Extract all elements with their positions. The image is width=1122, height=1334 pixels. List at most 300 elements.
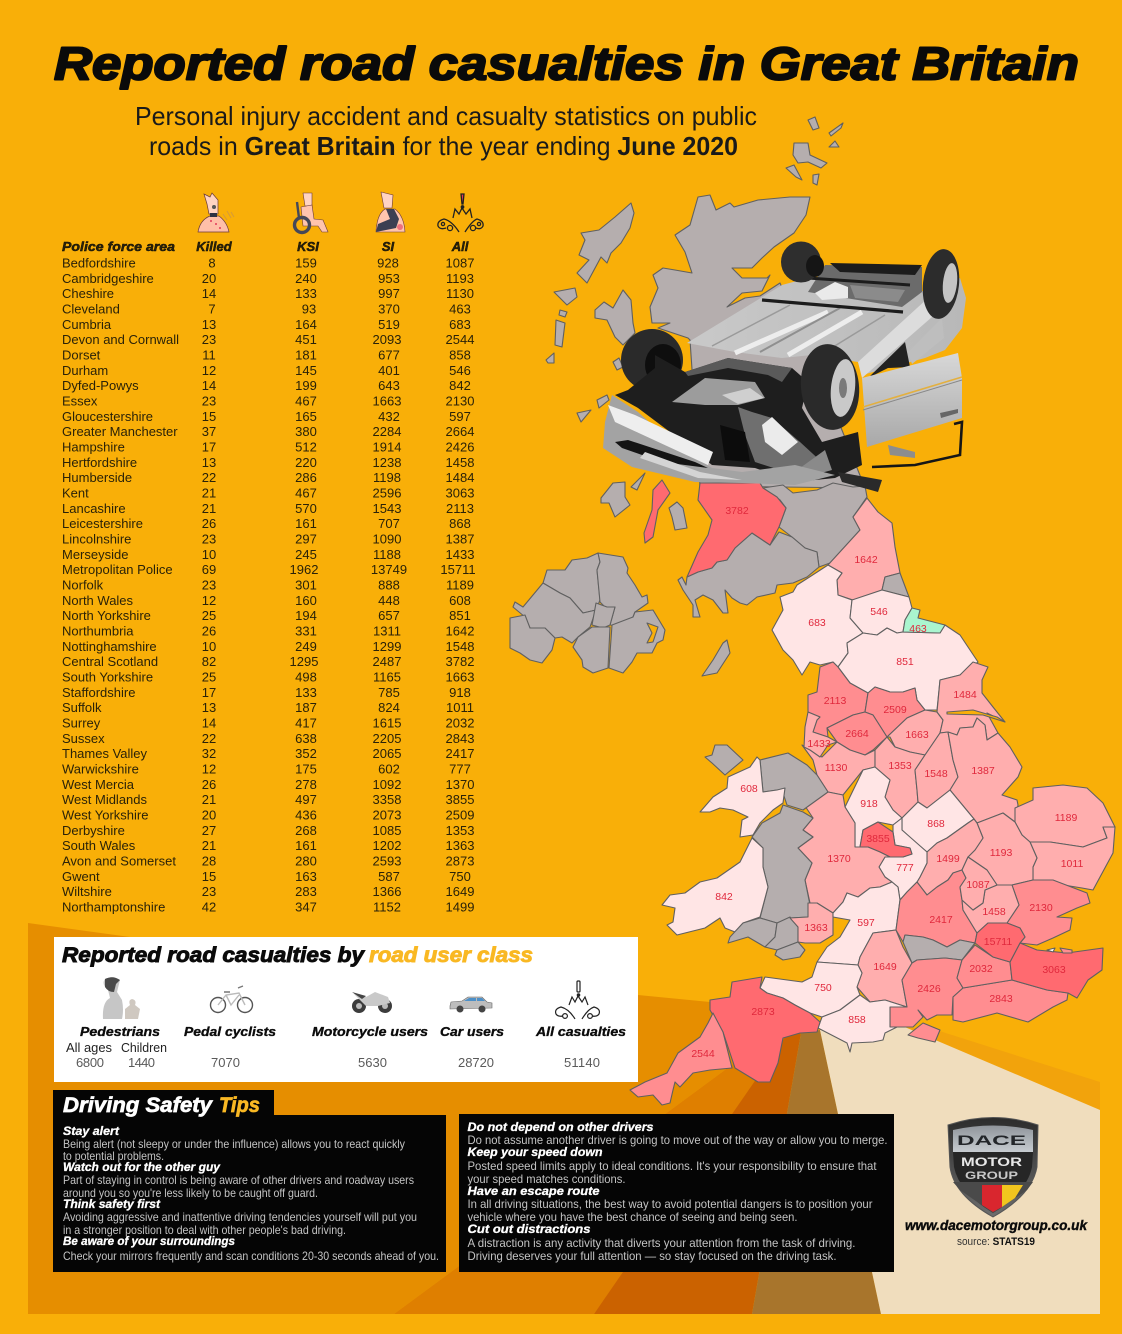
region: Derbyshire <box>875 737 925 818</box>
region: Suffolk: 1011 <box>1061 858 1083 870</box>
row: Northamptonshire: Northamptonshire <box>62 900 165 914</box>
tip: be aware <box>63 1236 439 1263</box>
row: Cambridgeshire: Cambridgeshire <box>62 271 154 286</box>
row: Cambridgeshire: 1193 <box>446 271 474 286</box>
subtitle <box>135 101 757 161</box>
region: Cumbria: 683 <box>808 617 826 629</box>
region: Cumbria <box>772 565 863 675</box>
road user labels: Motorcycle users <box>312 1024 428 1039</box>
row: Cheshire: 133 <box>295 286 317 301</box>
region: Essex: 2130 <box>1029 902 1053 914</box>
row: Devon and Cornwall: 2544 <box>446 332 474 347</box>
panel: driving safety tips left <box>53 1090 446 1272</box>
row: Norfolk: 23 <box>202 578 216 592</box>
row: Thames Valley: 2065 <box>373 746 401 761</box>
row: Hertfordshire: 13 <box>202 455 216 470</box>
row: Cleveland: 463 <box>449 302 471 316</box>
region: Devon: 2873 <box>751 1006 775 1018</box>
row: Lancashire: 1543 <box>373 501 401 516</box>
row: Warwickshire: 777 <box>449 762 471 776</box>
row: Surrey: 2032 <box>446 716 474 730</box>
row: Cambridgeshire <box>62 271 474 286</box>
map: Isle of Man <box>702 640 730 676</box>
tip: think safety first: Think safety first <box>63 1199 161 1211</box>
tip: watch out: around you so you're less likely to be caught off guard. <box>63 1186 318 1200</box>
row: Durham: Durham <box>62 363 108 378</box>
tip: stay alert <box>63 1126 405 1163</box>
row: Leicestershire: 868 <box>449 516 471 531</box>
map: North Wales grey area <box>760 753 828 810</box>
row: West Yorkshire: 20 <box>202 808 216 822</box>
row: Greater Manchester: 2284 <box>373 424 401 439</box>
region: Sussex: 2843 <box>989 993 1013 1005</box>
row: Kent: 467 <box>295 486 317 500</box>
row: Dyfed-Powys: 842 <box>449 378 471 393</box>
row: Gwent: 163 <box>295 869 317 884</box>
row: Merseyside: Merseyside <box>62 547 128 562</box>
region: Northumbria: 1642 <box>854 554 878 566</box>
icon: KSI wheelchair <box>294 193 328 232</box>
row: Leicestershire: 707 <box>378 516 400 531</box>
region: Bedfordshire: 1087 <box>966 879 990 891</box>
region: Cornwall <box>630 1013 732 1105</box>
row: Leicestershire: 26 <box>202 516 216 531</box>
row: South Yorkshire: 498 <box>295 670 317 684</box>
tip: speed <box>468 1147 877 1186</box>
row: Central Scotland: 82 <box>202 654 216 669</box>
road user labels: Pedestrians <box>80 1024 160 1039</box>
tip: stay alert: to potential problems. <box>63 1149 164 1163</box>
row: North Wales: 448 <box>378 593 400 608</box>
row: Merseyside: 10 <box>202 547 216 562</box>
row: Wiltshire <box>62 884 474 899</box>
row: Nottinghamshire: 1548 <box>446 639 474 654</box>
row: South Wales: 1202 <box>373 838 401 853</box>
region: Gloucestershire: 597 <box>857 917 875 929</box>
row: Kent <box>62 486 474 500</box>
row: Merseyside: 1433 <box>446 547 474 562</box>
region: Durham: 546 <box>870 606 888 618</box>
row: Lincolnshire: 23 <box>202 532 216 546</box>
row: Humberside: 286 <box>295 470 317 485</box>
row: West Yorkshire: 2509 <box>446 808 474 822</box>
row: Dorset: 677 <box>378 348 400 362</box>
row: Northumbria: Northumbria <box>62 624 134 638</box>
region: Merseyside: 1433 <box>807 738 831 750</box>
row: South Yorkshire: 1663 <box>446 670 474 684</box>
tip: distractions: Driving deserves your full attention — so stay focused on the driving task. <box>468 1249 836 1263</box>
row: Northamptonshire <box>62 900 474 914</box>
row: Durham: 145 <box>295 363 317 378</box>
row: Thames Valley <box>62 746 474 761</box>
row: Lincolnshire: 297 <box>295 532 317 546</box>
row: Bedfordshire: 1087 <box>446 256 474 270</box>
row: Avon and Somerset: 280 <box>295 854 317 868</box>
map: police force areas <box>510 117 1115 1105</box>
row: Hampshire <box>62 440 474 454</box>
row: Leicestershire: 161 <box>295 516 317 531</box>
region: Lincolnshire <box>948 718 1022 823</box>
row: Suffolk: 187 <box>295 700 317 715</box>
row: Metropolitan Police: 13749 <box>371 562 407 577</box>
row: North Yorkshire <box>62 608 471 623</box>
row: North Yorkshire: 657 <box>378 608 400 623</box>
row: Greater Manchester: 380 <box>295 424 317 439</box>
row: South Wales <box>62 838 474 853</box>
region: West Midlands <box>860 822 912 857</box>
tip: be aware: Check your mirrors frequently and scan conditions 20-30 seconds ahead of you. <box>63 1249 439 1263</box>
row: Gwent: 15 <box>202 869 216 884</box>
row: Kent: 3063 <box>446 486 474 500</box>
road user class heading <box>62 944 533 967</box>
region: West Yorkshire <box>865 687 925 737</box>
row: Derbyshire: Derbyshire <box>62 823 125 838</box>
region: Somerset: 750 <box>814 982 832 994</box>
row: Devon and Cornwall: 23 <box>202 332 216 347</box>
row: South Yorkshire: 1165 <box>373 670 401 684</box>
row: South Yorkshire: South Yorkshire <box>62 670 153 684</box>
table header <box>62 239 469 254</box>
tip: escape route: Have an escape route <box>468 1186 600 1198</box>
row: Suffolk: 13 <box>202 700 216 715</box>
row: Lincolnshire: 1090 <box>373 532 401 546</box>
pedestrian sub labels: Children <box>121 1040 167 1055</box>
row: Essex: 467 <box>295 394 317 408</box>
road user labels: All casualties <box>535 1024 626 1039</box>
row: Gloucestershire: Gloucestershire <box>62 409 153 424</box>
panel: road user class <box>54 937 638 1082</box>
row: Central Scotland <box>62 654 474 669</box>
region: Kent <box>1010 943 1103 998</box>
row: Norfolk <box>62 578 474 592</box>
map: Thames estuary islands <box>1047 948 1072 953</box>
table header: SI <box>382 239 395 254</box>
row: Devon and Cornwall <box>62 332 474 347</box>
row: West Yorkshire <box>62 808 474 822</box>
logo: Dace Motor Group shield: MOTOR <box>961 1155 1022 1169</box>
row: Greater Manchester: 2664 <box>446 424 474 439</box>
region: Cheshire <box>802 742 875 795</box>
region: Lancashire <box>808 662 868 737</box>
region: Leicestershire <box>902 790 974 852</box>
region: West Mercia: 1370 <box>827 853 851 865</box>
region: West Midlands: 3855 <box>866 833 890 845</box>
icon: car <box>450 997 492 1012</box>
row: Staffordshire: 918 <box>449 685 471 700</box>
pedestrian sub labels <box>66 1040 167 1055</box>
table header: All <box>451 239 469 254</box>
region: Hampshire: 2426 <box>917 983 941 995</box>
row: Cheshire <box>62 286 474 301</box>
region: Cornwall: 2544 <box>691 1048 715 1060</box>
row: West Mercia <box>62 777 474 792</box>
row: Humberside: 1484 <box>446 470 474 485</box>
row: Cleveland: Cleveland <box>62 302 120 316</box>
road user values: 51140 <box>564 1055 600 1070</box>
row: West Mercia: 1370 <box>446 777 474 792</box>
row: Dorset: 181 <box>295 348 317 362</box>
row: Durham: 401 <box>378 363 400 378</box>
row: Staffordshire <box>62 685 471 700</box>
row: Hampshire: 512 <box>295 440 317 454</box>
row: Derbyshire: 1353 <box>446 823 474 838</box>
car floor ribs <box>712 305 885 355</box>
road user values: 28720 <box>458 1055 494 1070</box>
row: Nottinghamshire: 249 <box>295 639 317 654</box>
region: Cleveland: 463 <box>909 623 927 635</box>
tips heading: Driving Safety <box>63 1094 213 1117</box>
row: West Yorkshire: 436 <box>295 808 317 822</box>
row: Nottinghamshire: Nottinghamshire <box>62 639 157 654</box>
tip: other drivers: Do not assume another driver is going to move out of the way or allow you to merge. <box>468 1133 888 1147</box>
region: Metropolitan Police: 15711 <box>984 936 1012 948</box>
row: Durham: 546 <box>449 363 471 378</box>
row: Essex: Essex <box>62 394 98 408</box>
region: Warwickshire <box>879 818 927 900</box>
region: Hampshire <box>890 958 963 1027</box>
row: North Wales: 12 <box>202 593 216 608</box>
row: Northumbria: 1311 <box>373 624 401 638</box>
map: Northern Ireland <box>510 553 665 673</box>
row: Thames Valley: 352 <box>295 746 317 761</box>
table: police force areas <box>62 239 476 914</box>
region: Wiltshire <box>857 930 912 1007</box>
row: North Wales: North Wales <box>62 593 134 608</box>
row: Sussex: 22 <box>202 731 216 746</box>
row: Hertfordshire: Hertfordshire <box>62 455 137 470</box>
row: Warwickshire: Warwickshire <box>62 762 139 776</box>
row: Thames Valley: 2417 <box>446 746 474 761</box>
row: Sussex: 2843 <box>446 731 474 746</box>
map: Anglesey <box>705 745 743 775</box>
row: West Yorkshire: 2073 <box>373 808 401 822</box>
tip: escape route <box>468 1186 872 1224</box>
tip: speed: Posted speed limits apply to ideal conditions. It's your responsibility to ensure that <box>468 1159 877 1173</box>
region: North Wales: 608 <box>740 783 758 795</box>
row: Thames Valley: Thames Valley <box>62 746 148 761</box>
row: Staffordshire: 133 <box>295 685 317 700</box>
road user class heading: Reported road casualties by <box>62 944 365 967</box>
tip: escape route: vehicle where you have the best chance of seeing and being seen. <box>468 1210 798 1224</box>
region: Hertfordshire <box>962 885 1019 933</box>
row: Metropolitan Police: 69 <box>202 562 216 577</box>
region: South Yorkshire: 1663 <box>905 729 929 741</box>
row: Cambridgeshire: 240 <box>295 271 317 286</box>
row: Greater Manchester <box>62 424 474 439</box>
row: Warwickshire: 602 <box>378 762 400 776</box>
icon: all casualties crash <box>438 194 483 232</box>
row: Surrey: Surrey <box>62 716 101 730</box>
row: Wiltshire: 23 <box>202 884 216 899</box>
region: Norfolk: 1189 <box>1055 812 1077 824</box>
car underbody <box>687 278 966 375</box>
row: Dyfed-Powys: Dyfed-Powys <box>62 378 139 393</box>
tip: be aware: Be aware of your surroundings <box>63 1236 235 1248</box>
row: Lincolnshire <box>62 532 474 546</box>
row: Dyfed-Powys <box>62 378 471 393</box>
icon: pedestrians <box>103 977 140 1019</box>
car door <box>862 353 962 467</box>
icon: killed column <box>198 193 234 232</box>
region: Nottinghamshire <box>915 732 958 808</box>
row: Merseyside: 245 <box>295 547 317 562</box>
region: Dyfed-Powys: 842 <box>715 891 733 903</box>
row: Greater Manchester: Greater Manchester <box>62 424 178 439</box>
row: Avon and Somerset: 2873 <box>446 854 474 868</box>
row: Lancashire: 2113 <box>446 501 474 516</box>
row: Lancashire: 570 <box>295 501 317 516</box>
row: Staffordshire: 17 <box>202 685 216 700</box>
row: North Yorkshire: 25 <box>202 608 216 623</box>
row: Lancashire <box>62 501 474 516</box>
region: Hertfordshire: 1458 <box>982 906 1006 918</box>
row: Staffordshire: 785 <box>378 685 400 700</box>
row: Suffolk: 1011 <box>446 700 474 715</box>
row: West Mercia: 1092 <box>373 777 401 792</box>
row: Durham: 12 <box>202 363 216 378</box>
row: West Midlands <box>62 792 474 807</box>
row: Sussex: Sussex <box>62 731 105 746</box>
car rear axle area <box>762 263 922 312</box>
region: North Yorkshire <box>838 625 978 710</box>
row: Suffolk: 824 <box>378 700 400 715</box>
row: Suffolk <box>62 700 474 715</box>
region: Gwent: 1363 <box>804 922 828 934</box>
row: North Yorkshire: 194 <box>295 608 317 623</box>
row: Central Scotland: 1295 <box>290 654 318 669</box>
row: Lancashire: Lancashire <box>62 501 126 516</box>
row: Cleveland: 93 <box>302 302 316 316</box>
row: Essex: 2130 <box>446 394 474 408</box>
row: Nottinghamshire: 10 <box>202 639 216 654</box>
car rear wheels <box>781 242 963 321</box>
row: Cleveland: 7 <box>208 302 216 316</box>
row: Avon and Somerset: 28 <box>202 854 216 868</box>
row: Derbyshire <box>62 823 474 838</box>
row: Warwickshire <box>62 762 471 776</box>
table header: KSI <box>297 239 319 254</box>
row: South Yorkshire: 25 <box>202 670 216 684</box>
row: Hertfordshire <box>62 455 474 470</box>
region: North Wales <box>700 757 785 837</box>
tip: speed: Keep your speed down <box>468 1147 602 1159</box>
row: Surrey: 14 <box>202 716 216 730</box>
row: Gloucestershire <box>62 409 471 424</box>
region: Somerset <box>760 962 862 1017</box>
row: Derbyshire: 268 <box>295 823 317 838</box>
row: Metropolitan Police: 1962 <box>290 562 318 577</box>
row: Bedfordshire: 159 <box>295 256 317 270</box>
region: Cheshire: 1130 <box>825 762 847 774</box>
row: West Midlands: 497 <box>295 792 317 807</box>
row: Durham <box>62 363 471 378</box>
row: Cheshire: 14 <box>202 286 216 301</box>
image: overturned crashed car <box>603 242 966 492</box>
row: Northumbria: 1642 <box>446 624 474 638</box>
region: Leicestershire: 868 <box>927 818 945 830</box>
row: Northamptonshire: 42 <box>202 900 216 914</box>
region: Surrey <box>957 945 1012 988</box>
row: Hampshire: 2426 <box>446 440 474 454</box>
row: Devon and Cornwall: Devon and Cornwall <box>62 332 179 347</box>
road user labels <box>80 1024 626 1039</box>
row: Humberside <box>62 470 474 485</box>
region: Durham <box>850 590 912 635</box>
website url: www.dacemotorgroup.co.uk <box>905 1218 1088 1233</box>
region: Greater Manchester: 2664 <box>845 728 869 740</box>
region: Lancashire: 2113 <box>824 695 846 707</box>
row: Lincolnshire: Lincolnshire <box>62 532 131 546</box>
tip: think safety first: Avoiding aggressive and inattentive driving tendencies yourself will put you <box>63 1210 417 1224</box>
row: Bedfordshire: 928 <box>377 256 399 270</box>
row: Bedfordshire: Bedfordshire <box>62 256 136 270</box>
region: Humberside: 1484 <box>953 689 977 701</box>
row: Leicestershire: Leicestershire <box>62 516 143 531</box>
row: Metropolitan Police: 15711 <box>440 562 476 577</box>
table header: Killed <box>196 239 233 254</box>
row: Dyfed-Powys: 199 <box>295 378 317 393</box>
background perspective road panel <box>28 923 1100 1314</box>
region: Metropolitan Police <box>975 923 1025 962</box>
row: Devon and Cornwall: 2093 <box>373 332 401 347</box>
row: Gloucestershire: 15 <box>202 409 216 424</box>
row: Central Scotland: Central Scotland <box>62 654 158 669</box>
row: Sussex <box>62 731 474 746</box>
row: Hampshire: 1914 <box>373 440 401 454</box>
region: Dorset: 858 <box>848 1014 866 1026</box>
row: Bedfordshire <box>62 256 474 270</box>
row: Cleveland <box>62 302 471 316</box>
row: Merseyside <box>62 547 474 562</box>
road user labels: Car users <box>440 1024 504 1039</box>
row: Humberside: 1198 <box>373 470 401 485</box>
region: Dorset <box>818 995 907 1052</box>
row: Cumbria: 683 <box>449 317 471 332</box>
road user values <box>76 1055 600 1070</box>
title: Reported road casualties in Great Britain <box>54 38 1079 90</box>
road user labels: Pedal cyclists <box>184 1024 276 1039</box>
row: Cambridgeshire: 20 <box>202 271 216 286</box>
region: Central Scotland: 3782 <box>725 505 749 517</box>
row: Northamptonshire: 1499 <box>446 900 474 914</box>
region: Nottinghamshire: 1548 <box>924 768 948 780</box>
row: Greater Manchester: 37 <box>202 424 216 439</box>
row: Hertfordshire: 1458 <box>446 455 474 470</box>
row: Norfolk: 1189 <box>446 578 474 592</box>
row: Northumbria <box>62 624 474 638</box>
region: Central Scotland <box>644 480 786 577</box>
car front right wheel <box>797 341 863 433</box>
row: Avon and Somerset: Avon and Somerset <box>62 854 176 868</box>
row: Humberside: Humberside <box>62 470 132 485</box>
row: Gwent: Gwent <box>62 869 100 884</box>
row: Cheshire: Cheshire <box>62 286 114 301</box>
region: Cleveland <box>903 608 945 635</box>
region: Staffordshire <box>845 767 902 847</box>
row: Derbyshire: 27 <box>202 823 216 838</box>
tips heading: Tips <box>219 1094 260 1117</box>
region: Gwent <box>790 903 833 943</box>
row: Bedfordshire: 8 <box>208 256 216 270</box>
row: Norfolk: 301 <box>295 578 317 592</box>
road user values: 6800 <box>76 1055 104 1070</box>
row: Devon and Cornwall: 451 <box>295 332 317 347</box>
region: Derbyshire: 1353 <box>888 760 912 772</box>
row: Leicestershire <box>62 516 471 531</box>
tip: watch out: Watch out for the other guy <box>63 1162 221 1174</box>
region: Northumbria <box>828 498 900 600</box>
row: West Midlands: West Midlands <box>62 792 148 807</box>
